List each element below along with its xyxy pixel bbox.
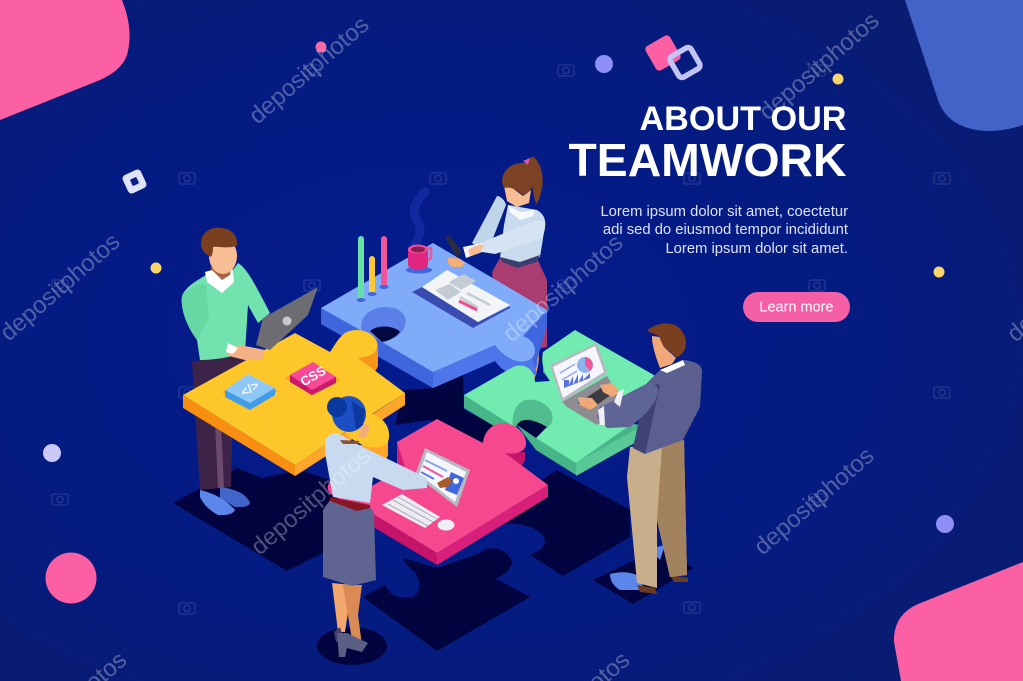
watermark text: depositphotos: [246, 442, 376, 561]
icon: code tile: </>: [238, 377, 262, 400]
watermark text: depositphotos: [498, 229, 628, 348]
watermark text: depositphotos: [244, 11, 374, 130]
icon: pink mug: [406, 244, 432, 274]
figure: woman with blue hair: [323, 396, 427, 657]
body text: [600, 204, 848, 257]
icon: document on blue piece: [412, 270, 510, 328]
watermark text: depositphotos: [754, 7, 884, 126]
figure: man in green sweater, upper body: [182, 228, 270, 360]
decorative dots: [43, 42, 954, 604]
puzzle piece: blue: [321, 243, 547, 388]
floor shadows of puzzle pieces: [173, 372, 693, 665]
body text: Lorem ipsum dolor sit amet, coectetur: [600, 204, 848, 220]
icon: small square ring: [121, 168, 148, 195]
title: TEAMWORK: [568, 134, 846, 186]
icon: CSS tile: [285, 362, 340, 396]
icon: overlapping squares: [644, 34, 701, 79]
icon: mouse: [438, 520, 454, 530]
figure: woman in blouse, upper body: [445, 157, 545, 268]
title: ABOUT OUR: [640, 100, 846, 138]
icon: CSS tile: CSS: [298, 363, 329, 389]
icon: keyboard: [382, 494, 440, 528]
puzzle piece: pink: [328, 419, 548, 565]
figure: man in sweater and beige trousers: [597, 323, 702, 594]
title: [568, 100, 846, 186]
watermark text: depositphotos: [749, 442, 879, 561]
icon: coffee steam: [414, 192, 425, 245]
icon: laptop on green piece: [550, 343, 625, 425]
button: Learn more: [743, 292, 850, 322]
watermark camera icons: [52, 65, 950, 614]
button: Learn more: Learn more: [759, 300, 834, 316]
icon: tablet: [415, 448, 470, 507]
body text: adi sed do eiusmod tempor incididunt: [603, 222, 848, 238]
puzzle piece: green: [464, 330, 680, 476]
figure: man in green sweater, legs: [192, 350, 250, 515]
icon: code tile: [222, 374, 278, 410]
figure: woman in blouse, skirt and leg: [492, 258, 547, 380]
icon: grey laptop: [256, 287, 318, 350]
chart: three coloured bars: [356, 236, 388, 302]
body text: Lorem ipsum dolor sit amet.: [665, 241, 848, 257]
puzzle piece: yellow: [183, 330, 405, 476]
